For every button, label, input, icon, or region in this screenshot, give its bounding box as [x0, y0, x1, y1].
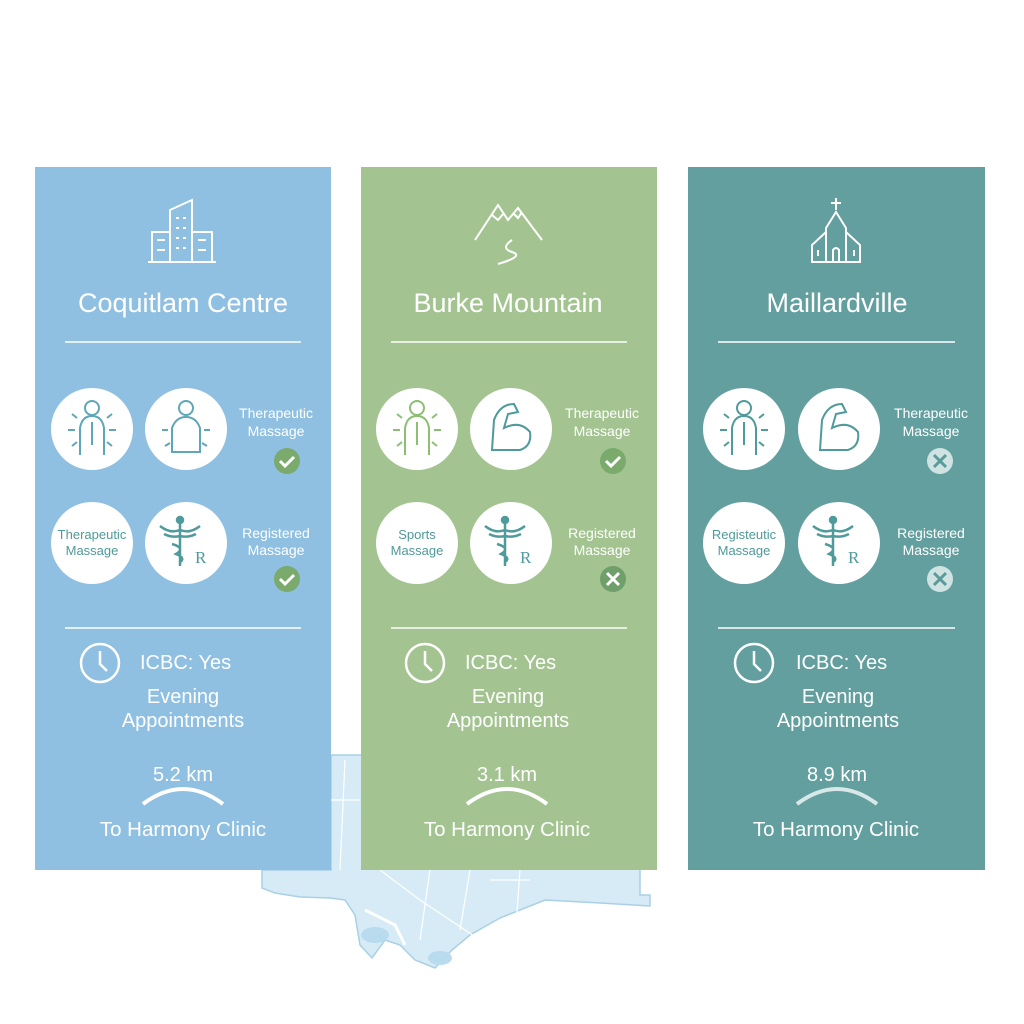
icon: clock — [81, 644, 119, 682]
panel: Maillardville: 8.9 km — [807, 764, 867, 786]
panel: Maillardville: To Harmony Clinic — [753, 818, 919, 841]
map background — [262, 755, 650, 968]
panel: Maillardville: Registeutic — [712, 527, 777, 542]
panel: Burke Mountain: Appointments — [447, 710, 569, 732]
panel: Burke Mountain: Massage — [391, 543, 443, 558]
distance: 5.2 km — [153, 764, 213, 786]
panel: Maillardville: R — [848, 548, 860, 567]
panel: Maillardville — [688, 167, 985, 870]
panel: Burke Mountain: Therapeutic — [565, 405, 639, 421]
panel: Burke Mountain — [361, 167, 657, 870]
title: Coquitlam Centre — [78, 288, 288, 318]
panel: Coquitlam Centre: To Harmony Clinic — [100, 818, 266, 841]
panel: Maillardville: Evening — [802, 686, 874, 708]
service icons: R — [195, 548, 207, 567]
panel: Burke Mountain: To Harmony Clinic — [424, 818, 590, 841]
panel: Maillardville: Massage — [903, 423, 960, 439]
panel: Maillardville: Maillardville — [766, 288, 908, 318]
icon: building — [148, 200, 216, 262]
panel: Maillardville: ICBC: Yes — [796, 652, 887, 674]
panel: Burke Mountain: Registered — [568, 525, 636, 541]
panel: Maillardville: Massage — [718, 543, 770, 558]
service icons — [51, 388, 313, 592]
panel: Burke Mountain: Massage — [574, 542, 631, 558]
panel: Coquitlam Centre: ICBC: Yes — [140, 652, 231, 674]
panel: Maillardville: Registered — [897, 525, 965, 541]
panel: Burke Mountain: Evening — [472, 686, 544, 708]
panel: Burke Mountain: Massage — [574, 423, 631, 439]
service icons: Therapeutic — [58, 527, 127, 542]
panel: Maillardville: Appointments — [777, 710, 899, 732]
panel: Coquitlam Centre: Appointments — [122, 710, 244, 732]
service icons: Registered — [242, 525, 310, 541]
panel: Maillardville: Massage — [903, 542, 960, 558]
panel: Burke Mountain: 3.1 km — [477, 764, 537, 786]
panel: Coquitlam Centre — [35, 167, 331, 870]
panel: Burke Mountain: ICBC: Yes — [465, 652, 556, 674]
icon: mountain — [475, 205, 542, 264]
icon: church — [812, 198, 860, 262]
panel: Maillardville: Therapeutic — [894, 405, 968, 421]
service icons: Massage — [248, 423, 305, 439]
service icons: Massage — [248, 542, 305, 558]
panel: Burke Mountain: R — [520, 548, 532, 567]
service icons: Therapeutic — [239, 405, 313, 421]
service icons: Massage — [66, 543, 118, 558]
panel: Coquitlam Centre: Evening — [147, 686, 219, 708]
panel: Burke Mountain: Sports — [398, 527, 436, 542]
panel: Burke Mountain: Burke Mountain — [413, 288, 603, 318]
